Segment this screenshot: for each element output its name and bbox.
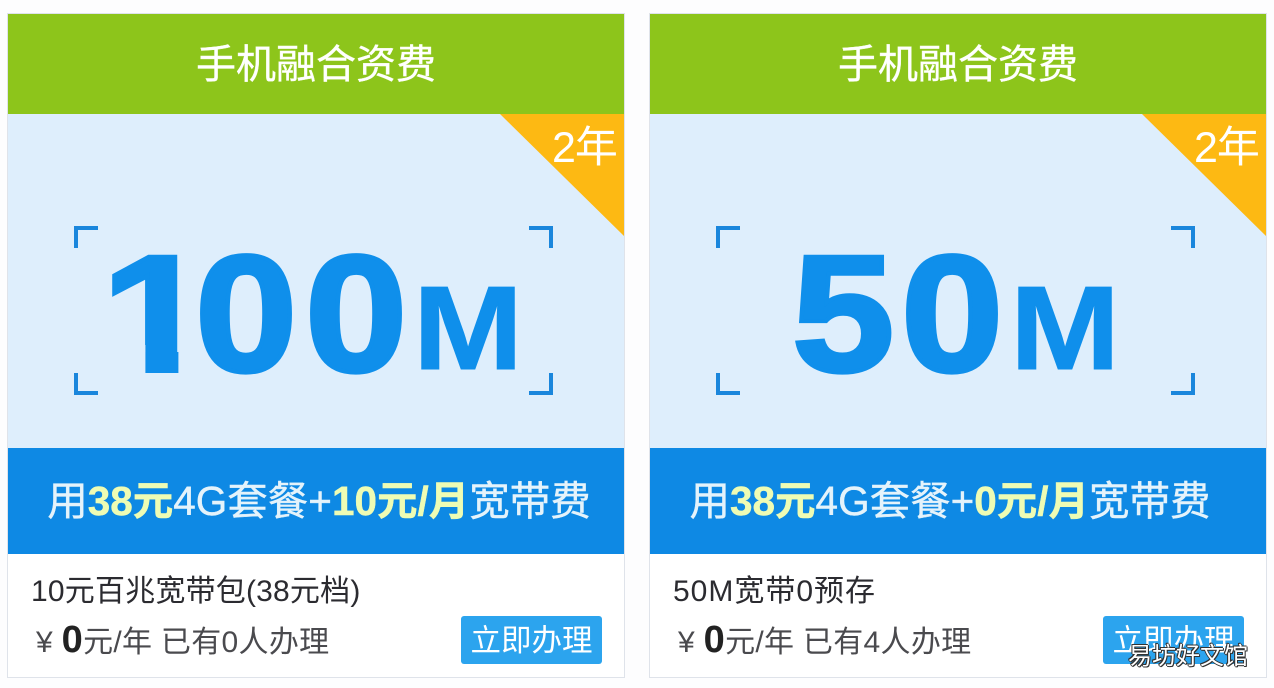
panel: 100M plan card: [8, 14, 624, 677]
plan name: 10元百兆宽带包(38元档): [31, 575, 361, 608]
offer band: [650, 448, 1266, 554]
speed frame bracket bottom-right: [529, 373, 553, 395]
badge text: 2年: [1194, 124, 1259, 172]
speed number: [112, 222, 407, 407]
speed panel: [650, 114, 1266, 448]
button: [461, 616, 602, 664]
speed number: 0: [901, 222, 1003, 407]
button: 立即办理: [1112, 624, 1234, 658]
speed frame bracket top-right: [529, 226, 553, 248]
header band: [8, 14, 624, 114]
speed unit: M: [1010, 262, 1120, 395]
speed number: [792, 222, 1003, 407]
speed frame bracket top-left: [74, 226, 98, 248]
speed frame bracket bottom-left: [74, 373, 98, 395]
price and sign-up count: ¥ 0元/年 已有4人办理: [678, 619, 971, 661]
offer text: 用38元4G套餐+0元/月宽带费: [689, 478, 1211, 524]
plan name: 50M宽带0预存: [673, 575, 876, 608]
button: [1103, 616, 1244, 664]
panel: 50M plan card: [650, 14, 1266, 677]
speed number: 0: [195, 222, 297, 407]
speed panel: [8, 114, 624, 448]
offer band: [8, 448, 624, 554]
speed number: 1: [101, 222, 212, 407]
price and sign-up count: ¥ 0元/年 已有0人办理: [36, 619, 329, 661]
speed frame bracket bottom-left: [716, 373, 740, 395]
speed number: 0: [305, 222, 407, 407]
corner badge triangle: [1142, 114, 1266, 236]
speed unit: M: [413, 262, 523, 395]
heading: 手机融合资费: [838, 43, 1078, 87]
header band: [650, 14, 1266, 114]
badge text: 2年: [552, 124, 617, 172]
speed frame bracket top-left: [716, 226, 740, 248]
offer text: 用38元4G套餐+10元/月宽带费: [47, 478, 591, 524]
heading: 手机融合资费: [196, 43, 436, 87]
watermark: 易坊好文馆: [1128, 643, 1248, 670]
corner badge triangle: [500, 114, 624, 236]
speed number: 5: [792, 222, 894, 407]
button: 立即办理: [470, 624, 592, 658]
speed frame bracket top-right: [1171, 226, 1195, 248]
speed frame bracket bottom-right: [1171, 373, 1195, 395]
